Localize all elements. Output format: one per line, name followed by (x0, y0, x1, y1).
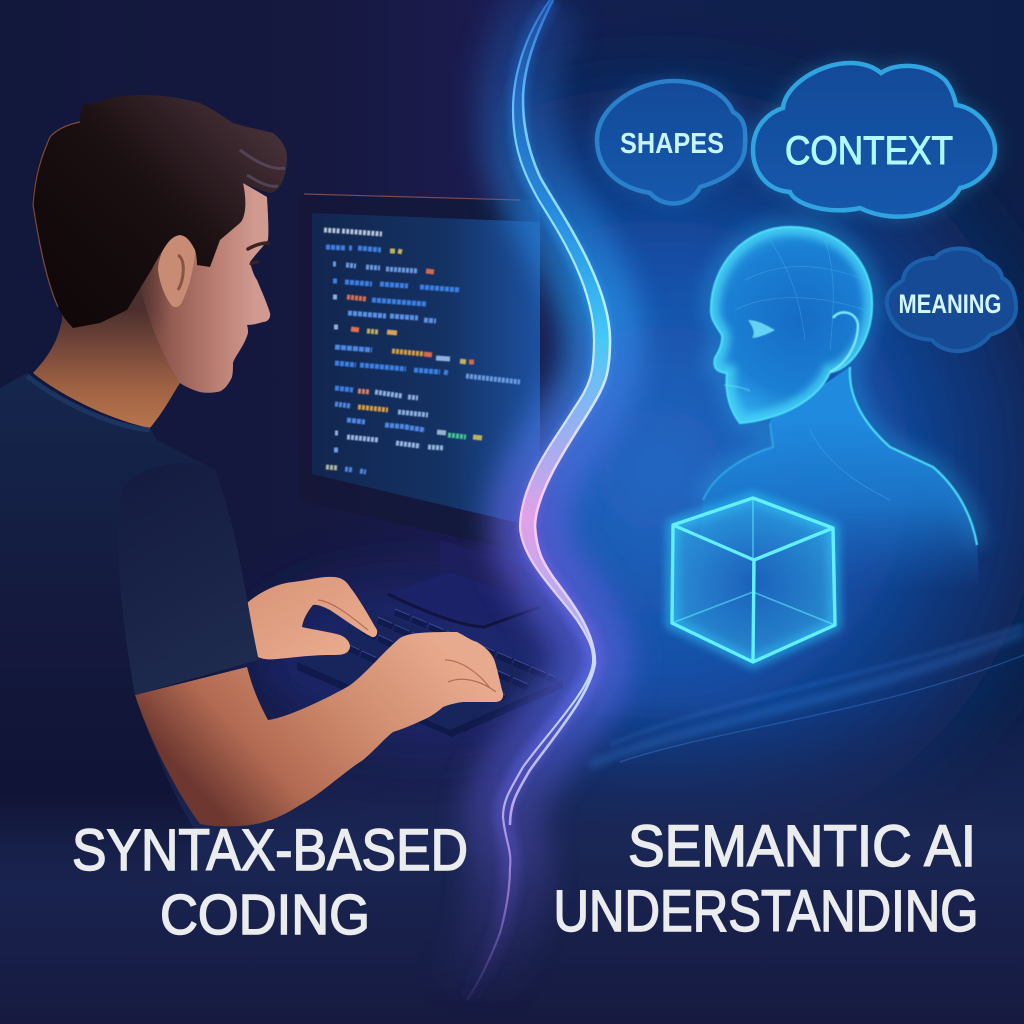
eye glow (748, 320, 775, 338)
cloud: shapes: SHAPES (620, 128, 724, 160)
wave divider (467, 0, 610, 1000)
person (0, 95, 503, 890)
collar (27, 376, 150, 430)
bright band between lines (513, 0, 610, 663)
ear (158, 235, 195, 307)
neck (33, 230, 200, 428)
sleeve (118, 463, 258, 695)
finger lines (318, 600, 496, 692)
head fill (711, 227, 872, 423)
eye and brow (248, 243, 268, 264)
monitor screen (312, 213, 540, 528)
cloud: context (753, 63, 995, 217)
title: syntax-based coding (72, 818, 468, 947)
code lines (324, 230, 520, 472)
energy streaks lower right (590, 625, 1024, 765)
lips (724, 385, 750, 391)
cloud: context: CONTEXT (785, 129, 953, 173)
keyboard (297, 609, 563, 737)
cube (672, 498, 835, 662)
far hand (247, 577, 377, 659)
hair (32, 95, 287, 328)
outlines (711, 227, 977, 545)
title: semantic ai understanding: SEMANTIC AI (628, 814, 976, 879)
torso fill (695, 367, 980, 590)
monitor stand (440, 540, 520, 600)
face (135, 183, 270, 393)
outer glow (703, 227, 977, 543)
hair rim light (33, 122, 80, 307)
cloud: meaning (887, 248, 1016, 351)
bangs underside (240, 150, 285, 186)
title: syntax-based coding: CODING (160, 883, 370, 947)
title: semantic ai understanding (554, 814, 978, 944)
torso shirt (0, 373, 258, 890)
cloud: meaning: MEANING (898, 289, 1002, 319)
monitor (298, 194, 540, 627)
mesh lines on head (735, 240, 890, 500)
forearm and near hand (135, 632, 503, 826)
holographic human head and torso (695, 227, 980, 590)
cloud: shapes (597, 81, 745, 203)
title: syntax-based coding: SYNTAX-BASED (72, 818, 468, 883)
head inner rim glow (711, 227, 872, 423)
ear (830, 312, 858, 372)
